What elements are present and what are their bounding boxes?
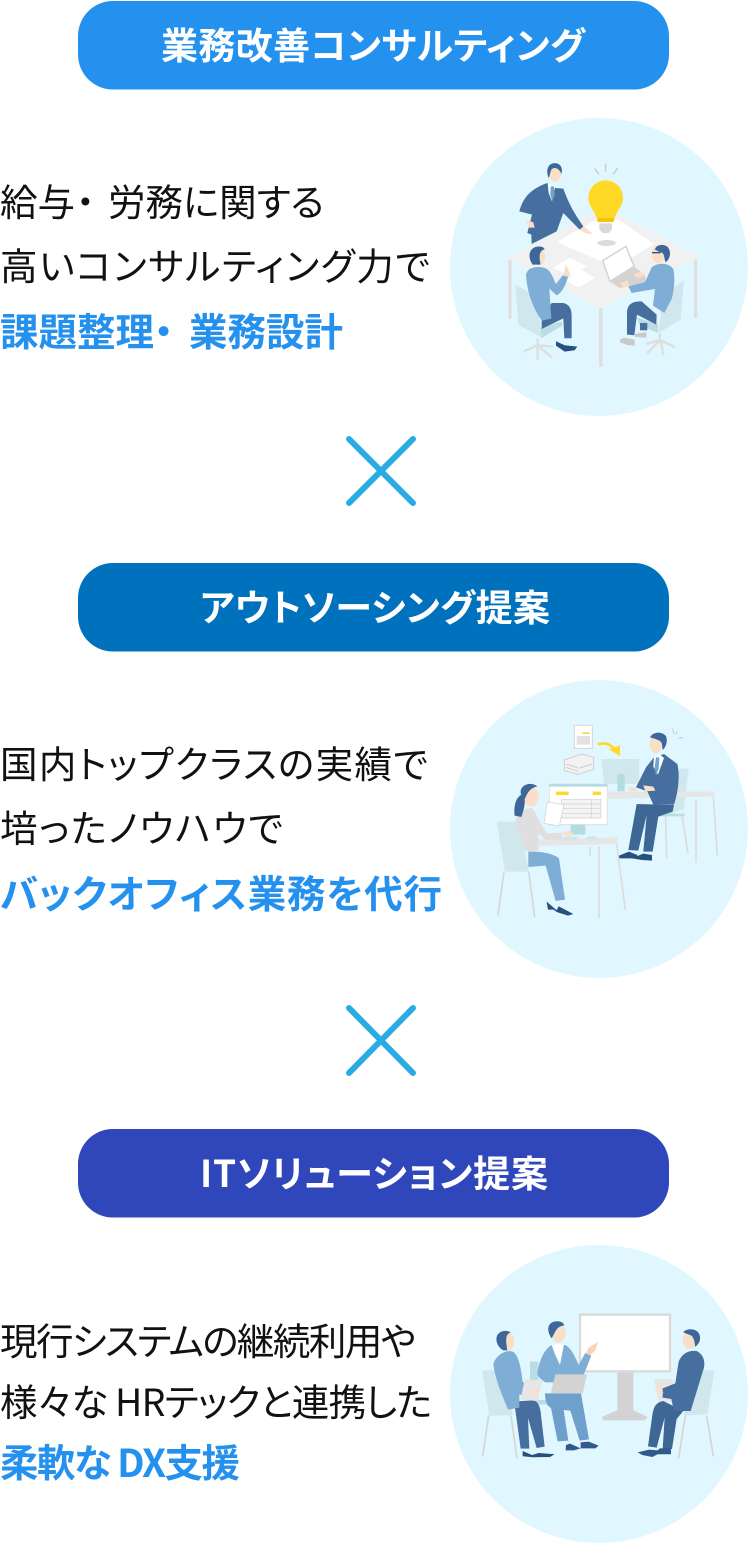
text block: outsourcing description: 培ったノウハウで: [0, 798, 283, 853]
text block: consulting description: 労務に関する: [108, 172, 324, 227]
section: IT solutions: [0, 1129, 748, 1543]
man in suit at desk: [628, 804, 674, 852]
front chair: [497, 822, 529, 872]
heading pill: 業務改善コンサルティング: 業務改善コンサルティング: [161, 16, 587, 70]
text block: IT description: 柔軟な DX支援: [0, 1433, 240, 1489]
section: consulting: [0, 1, 748, 416]
seated woman: [542, 303, 572, 338]
right listener: [654, 1379, 677, 1402]
left chair: [515, 285, 542, 338]
document and paper stack: [574, 725, 592, 748]
text block: consulting description: ・: [154, 302, 173, 358]
front desk: [537, 837, 617, 846]
back monitor: [601, 759, 639, 784]
back chair: [662, 768, 689, 816]
standing man: [519, 183, 583, 244]
middle presenter: [530, 1362, 538, 1401]
section: outsourcing: [0, 563, 748, 978]
display screen on stand: [617, 1371, 633, 1410]
text block: IT description: 現行システムの継続利用や: [0, 1311, 416, 1366]
heading pill: ITソリューション提案: ITソリューション提案: [200, 1144, 548, 1198]
text block: outsourcing description: 国内トップクラスの実績で: [0, 734, 428, 789]
front monitor: [549, 784, 607, 825]
text block: outsourcing description: [0, 734, 442, 920]
heading pill: アウトソーシング提案: [78, 563, 669, 652]
right listener chair: [684, 1370, 715, 1416]
heading pill: 業務改善コンサルティング: [78, 1, 669, 90]
text block: consulting description: 給与: [0, 172, 75, 227]
light bulb: [588, 180, 623, 222]
yellow arrow: [598, 743, 615, 752]
text block: consulting description: ・: [76, 172, 95, 227]
woman with document: [528, 852, 565, 901]
illustration: presentation with screen: [450, 1245, 748, 1543]
seated man with glasses: [627, 301, 657, 335]
text block: consulting description: 課題整理: [0, 302, 154, 358]
multiply sign 1: [349, 439, 413, 503]
heading pill: アウトソーシング提案: アウトソーシング提案: [200, 578, 550, 632]
multiply sign 2: [349, 1008, 413, 1073]
heading pill: ITソリューション提案: [78, 1129, 669, 1218]
text block: outsourcing description: バックオフィス業務を代行: [0, 864, 442, 920]
text block: IT description: 様々な HRテックと連携した: [0, 1372, 432, 1427]
text block: consulting description: 高いコンサルティング力で: [0, 236, 430, 291]
left listener chair: [482, 1370, 513, 1416]
text block: consulting description: 業務設計: [189, 302, 343, 358]
back desk: [608, 792, 715, 799]
left listener: [513, 1400, 545, 1449]
text block: IT description: [0, 1311, 432, 1489]
illustration: office workers handling documents: [450, 680, 748, 978]
illustration: meeting around table with light bulb: [450, 118, 748, 416]
text block: consulting description: [0, 172, 430, 358]
right chair: [658, 280, 684, 333]
